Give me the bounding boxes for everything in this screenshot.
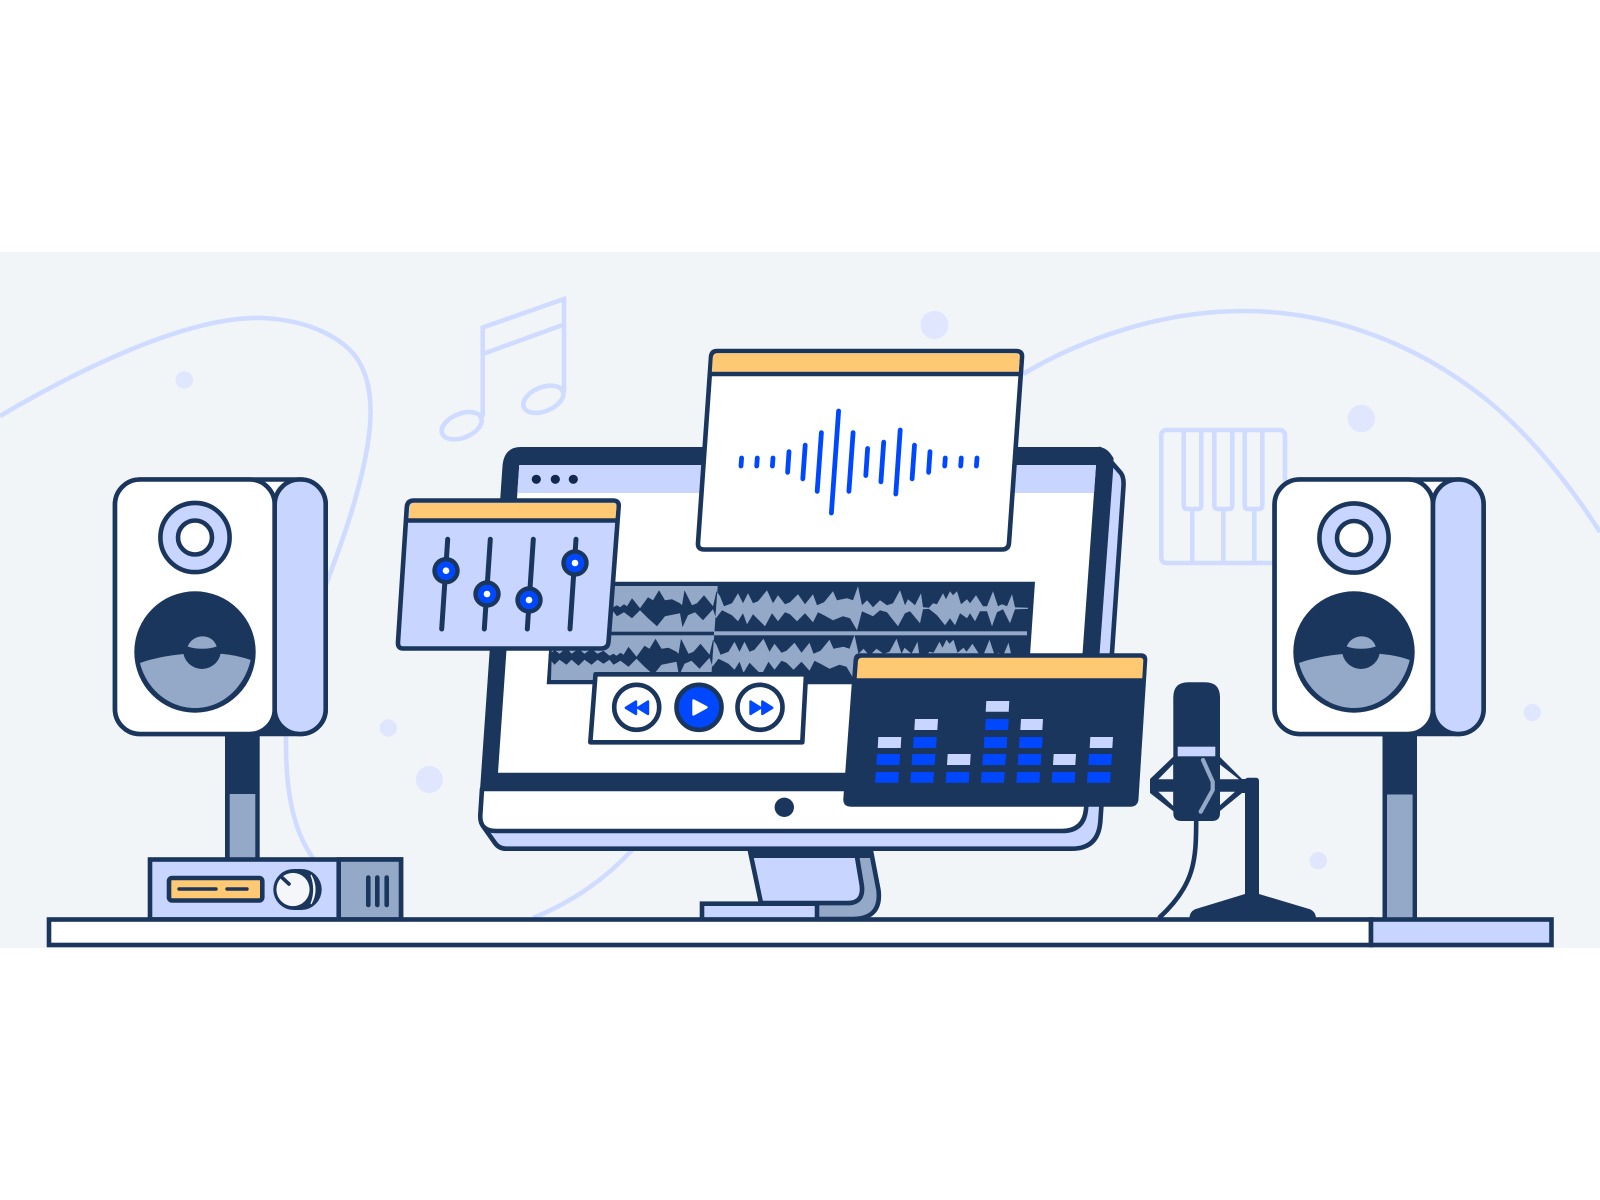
amplifier vents — [368, 878, 387, 905]
monitor power dot — [775, 798, 794, 817]
decorative curve bottom — [533, 849, 633, 918]
monitor bezel — [480, 447, 1114, 790]
monitor stand — [702, 849, 879, 920]
left speaker stand — [225, 734, 260, 860]
monitor chin — [480, 789, 1088, 831]
play button — [676, 685, 722, 730]
slider knob 3 — [515, 586, 543, 614]
fast forward button — [738, 685, 782, 730]
slider tracks — [442, 539, 576, 629]
mic band — [1178, 747, 1215, 756]
equalizer window — [843, 653, 1147, 807]
rewind button — [614, 685, 659, 730]
amplifier — [150, 860, 401, 920]
equalizer peak cells — [878, 701, 1113, 765]
sound bars — [741, 411, 977, 513]
waveform track — [536, 582, 1035, 684]
amplifier display — [169, 878, 262, 900]
sliders window — [398, 500, 619, 648]
decorative dots — [176, 311, 1541, 869]
transport controls panel — [590, 674, 806, 742]
woofer — [1293, 591, 1415, 713]
decorative curve right — [1023, 311, 1600, 532]
monitor screen — [498, 465, 1096, 773]
woofer — [134, 591, 256, 713]
mic highlight — [1201, 760, 1213, 812]
tweeter — [160, 503, 230, 572]
right speaker stand — [1382, 734, 1417, 920]
left speaker — [115, 480, 326, 734]
slider knob 1 — [432, 557, 460, 584]
shock mount — [1150, 757, 1250, 811]
amplifier knob — [273, 869, 322, 910]
mic cable — [1159, 821, 1196, 918]
equalizer blue cells — [875, 719, 1112, 783]
icon: music note — [438, 299, 567, 445]
monitor back edge — [483, 449, 1124, 849]
tweeter — [1319, 503, 1389, 573]
decorative background shapes — [0, 299, 1600, 918]
decorative curve left — [0, 318, 371, 858]
mic body — [1173, 682, 1220, 821]
illustration: music production studio — [0, 252, 1600, 948]
icon: piano keys — [1161, 430, 1285, 563]
slider knob 4 — [561, 549, 589, 577]
slider knob 2 — [473, 580, 501, 608]
microphone — [1150, 682, 1316, 919]
mic stand — [1189, 778, 1316, 919]
audio wave window — [698, 351, 1022, 550]
monitor toolbar — [517, 465, 1096, 493]
desk — [49, 920, 1552, 945]
background panel — [0, 252, 1600, 948]
right speaker — [1275, 480, 1484, 734]
monitor — [480, 447, 1124, 849]
